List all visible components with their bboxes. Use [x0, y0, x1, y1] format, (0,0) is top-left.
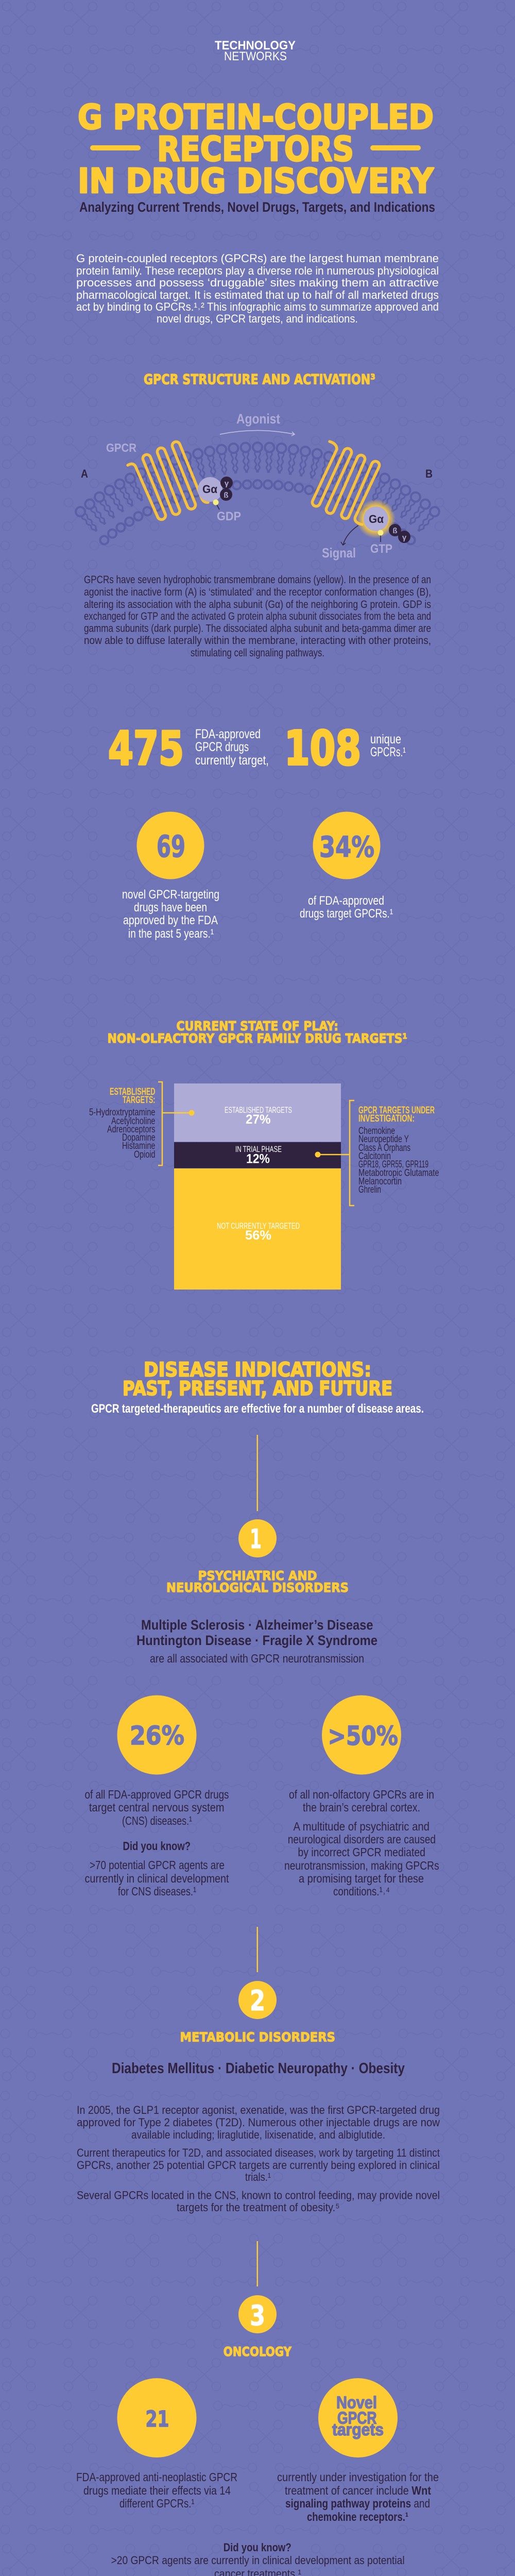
logo: Technology Networks: NETWORKS [224, 49, 287, 63]
stat circle: >50%: >50% [328, 1721, 398, 1752]
number badge 3: 3 [250, 2299, 265, 2332]
callout: targets under investigation bracket: Ghrelin [358, 1184, 381, 1195]
text: GPCR mechanism description: GPCRs have seven hydrophobic transmembrane domains (yellow). In the presence of an [84, 574, 431, 586]
text: >50% caption: the brain’s cerebral cortex. [303, 1801, 420, 1814]
callout: targets under investigation bracket: GPCR TARGETS UNDER [358, 1105, 435, 1116]
text: 21 caption: FDA-approved anti-neoplastic GPCR [76, 2470, 237, 2484]
number badge 1: 1 [250, 1524, 262, 1555]
chart: stacked bar of GPCR targets [174, 1083, 341, 1290]
bar segment: not currently targeted 56% [174, 1168, 341, 1290]
callout: targets under investigation bracket [315, 1100, 439, 1206]
text: GPCR mechanism description: altering its association with the alpha subunit (Gα) of the neighboring G protein. GDP is [84, 599, 431, 611]
stat circle: 69: in the past 5 years.¹ [128, 927, 214, 941]
intro paragraph: protein family. These receptors play a diverse role in numerous physiological [76, 264, 439, 277]
stat: 475 drugs target 108 GPCRs: unique [370, 732, 401, 747]
stat circle: 69: novel GPCR-targeting [122, 888, 219, 902]
stat circle: 34%: drugs target GPCRs.¹ [300, 907, 393, 921]
text: novel targets caption [277, 2470, 439, 2523]
stat circle: novel GPCR targets: targets [332, 2420, 384, 2439]
stat circle: 69 [122, 812, 219, 941]
text: oncology did you know: Did you know? [224, 2541, 291, 2554]
callout: targets under investigation bracket: Neuropeptide Y [358, 1133, 409, 1145]
arrow: signal [341, 526, 358, 545]
bar segment: not currently targeted 56%: 56% [245, 1228, 271, 1243]
callout: targets under investigation bracket: Metabotropic Glutamate [358, 1167, 439, 1179]
bar segment: not currently targeted 56%: NOT CURRENTLY TARGETED [217, 1221, 300, 1231]
number badge 3 [238, 2295, 277, 2333]
diagram labels [81, 411, 433, 561]
callout: targets under investigation bracket: Melanocortin [358, 1176, 402, 1187]
callout: established targets bracket: Opioid [134, 1149, 156, 1160]
stat: 475 drugs target 108 GPCRs [108, 721, 406, 776]
text: metabolic disorders paragraph: targets for the treatment of obesity.⁵ [177, 2201, 340, 2214]
text: 21 caption: drugs mediate their effects via 14 [83, 2484, 231, 2497]
callout: established targets bracket: TARGETS: [123, 1095, 156, 1106]
callout: targets under investigation bracket: GPR18, GPR55, GPR119 [358, 1159, 428, 1170]
text: >50% caption: A multitude of psychiatric and [294, 1820, 430, 1833]
text: 26% caption and did you know: for CNS diseases.¹ [118, 1885, 196, 1898]
callout: established targets bracket: 5-Hydroxtryptamine [89, 1107, 156, 1118]
text: metabolic disorders paragraph: Current therapeutics for T2D, and associated diseases, work by targeting 11 distinct [77, 2146, 440, 2159]
heading: disease indications: DISEASE INDICATIONS: [144, 1358, 371, 1381]
callout: targets under investigation bracket: Class A Orphans [358, 1142, 410, 1154]
arrow: agonist [220, 431, 295, 436]
text: GPCR mechanism description: stimulating cell signaling pathways. [191, 647, 324, 659]
text: metabolic disease list: Diabetes Mellitus · Diabetic Neuropathy · Obesity [112, 2060, 405, 2077]
callout: established targets bracket: Acetylcholine [111, 1115, 156, 1127]
heading: current state of play: CURRENT STATE OF PLAY: [176, 1019, 338, 1033]
text: metabolic disorders paragraph: available including; liraglutide, lixisenatide, and albiglutide. [131, 2128, 385, 2141]
intro paragraph: pharmacological target. It is estimated that up to half of all marketed drugs [76, 289, 439, 301]
callout: established targets bracket: Dopamine [122, 1132, 156, 1143]
intro paragraph: act by binding to GPCRs.¹˒² This infographic aims to summarize approved and [76, 300, 439, 313]
text: GPCR mechanism description: agonist the inactive form (A) is ‘stimulated’ and the receptor conformation changes (B), [84, 586, 431, 598]
diagram labels: A [81, 467, 88, 480]
stat: 475 drugs target 108 GPCRs: FDA-approved [195, 727, 261, 741]
callout: established targets bracket [89, 1082, 195, 1165]
text: 26% caption and did you know: Did you know? [123, 1839, 191, 1853]
active G protein with glow: ß [392, 527, 398, 535]
stat circle: 34% [300, 812, 393, 921]
stat circle: 21 [117, 2378, 197, 2458]
active G protein with glow: γ [402, 533, 407, 542]
title: G PROTEIN-COUPLED [78, 97, 434, 137]
heading: current state of play [107, 1019, 407, 1046]
diagram labels: Agonist [236, 411, 280, 427]
diagram labels: B [425, 467, 433, 480]
diagram: GPCR activation on membrane [74, 411, 441, 561]
text: novel targets caption: treatment of cancer include Wnt [285, 2484, 431, 2497]
bar segment: in trial phase 12%: IN TRIAL PHASE [235, 1144, 282, 1154]
text: metabolic disorders paragraph: GPCRs, another 25 potential GPCR targets are currently being explored in clinical [77, 2159, 440, 2172]
text: GPCR mechanism description: now able to diffuse laterally within the membrane, interacting with other proteins, [84, 635, 431, 647]
diagram labels: GDP [217, 510, 241, 523]
callout: established targets bracket: ESTABLISHED [110, 1087, 156, 1097]
text: 26% caption and did you know: >70 potential GPCR agents are [90, 1858, 225, 1872]
text: GPCR mechanism description: gamma subunits (dark purple). The dissociated alpha subunit and beta-gamma dimer are [84, 622, 431, 635]
text: >50% caption: neurotransmission, making GPCRs [284, 1859, 439, 1872]
stat: 475 drugs target 108 GPCRs: currently target, [195, 753, 269, 768]
text: neurological diseases list: Huntington Disease · Fragile X Syndrome [136, 1633, 377, 1648]
connector line 1 [256, 1435, 258, 1511]
text: >50% caption [284, 1788, 439, 1898]
intro paragraph: G protein-coupled receptors (GPCRs) are the largest human membrane [76, 252, 439, 265]
heading: psychiatric and neurological disorders: PSYCHIATRIC AND [198, 1568, 317, 1583]
title: IN DRUG DISCOVERY [78, 161, 434, 201]
text: novel targets caption: chemokine receptors.¹ [307, 2510, 408, 2523]
intro paragraph: novel drugs, GPCR targets, and indications. [157, 312, 358, 325]
diagram labels: Signal [322, 545, 356, 561]
stat circle: novel GPCR targets: GPCR [337, 2408, 377, 2428]
text: 21 caption: different GPCRs.¹ [119, 2497, 195, 2510]
stat circle: novel GPCR targets [318, 2378, 398, 2458]
inactive G protein [198, 477, 233, 510]
text: oncology did you know [111, 2541, 405, 2576]
text: >50% caption: by incorrect GPCR mediated [298, 1845, 425, 1859]
stat: 475 drugs target 108 GPCRs: 108 [284, 721, 361, 776]
number badge 1 [238, 1519, 277, 1557]
text: >50% caption: neurological disorders are caused [288, 1833, 436, 1846]
stat: 475 drugs target 108 GPCRs: GPCR drugs [195, 740, 249, 754]
active G protein with glow [356, 499, 410, 543]
bar segment: established targets 27% [174, 1083, 341, 1142]
text: novel targets caption: signaling pathway proteins and [285, 2497, 430, 2510]
active G protein with glow: Gα [369, 513, 384, 526]
title [78, 97, 434, 201]
stat circle: novel GPCR targets: Novel [336, 2393, 377, 2412]
inactive G protein: Gα [202, 483, 217, 496]
callout: established targets bracket: Histamine [122, 1140, 156, 1151]
logo: Technology Networks: TECHNOLOGY [215, 39, 296, 53]
stat circle: 69: drugs have been [134, 901, 207, 914]
heading: disease indications: PAST, PRESENT, AND FUTURE [123, 1377, 392, 1400]
bar segment: in trial phase 12% [174, 1142, 341, 1168]
callout: established targets bracket: Adrenoceptors [107, 1124, 156, 1135]
callout: targets under investigation bracket: INVESTIGATION: [358, 1113, 415, 1124]
text: >50% caption: of all non-olfactory GPCRs are in [289, 1788, 434, 1801]
text: 21 caption [76, 2470, 237, 2510]
intro paragraph: processes and possess ‘druggable’ sites making them an attractive [76, 276, 439, 289]
intro paragraph [76, 252, 439, 325]
text: metabolic disorders paragraph: approved for Type 2 diabetes (T2D). Numerous other injectable drugs are now [77, 2116, 440, 2129]
heading: GPCR structure and activation: GPCR STRUCTURE AND ACTIVATION³ [144, 372, 375, 387]
stat circle: 26%: 26% [130, 1721, 184, 1751]
subheading: disease indications: GPCR targeted-therapeutics are effective for a number of disease areas. [91, 1402, 424, 1416]
text: metabolic disorders paragraph: trials.¹ [245, 2171, 271, 2183]
title: RECEPTORS [157, 129, 354, 169]
bar segment: in trial phase 12%: 12% [246, 1152, 270, 1166]
diagram labels: GPCR [106, 441, 136, 454]
stat circle: 34%: of FDA-approved [308, 894, 384, 908]
text: neurological diseases list [136, 1617, 377, 1665]
diagram labels: GTP [370, 542, 392, 556]
heading: psychiatric and neurological disorders: NEUROLOGICAL DISORDERS [166, 1580, 349, 1595]
callout: targets under investigation bracket: Chemokine [358, 1125, 395, 1137]
text: novel targets caption: currently under investigation for the [277, 2470, 439, 2484]
heading: disease indications [123, 1358, 392, 1400]
heading: psychiatric and neurological disorders [166, 1568, 349, 1595]
number badge 2: 2 [250, 1985, 265, 2017]
text: GPCR mechanism description [84, 574, 431, 659]
left GPCR serpentine [128, 442, 208, 519]
text: GPCR mechanism description: exchanged for GTP and the activated G protein alpha subunit dissociates from the beta and [84, 611, 431, 622]
stat circle: 69: approved by the FDA [123, 913, 218, 927]
text: 26% caption and did you know: of all FDA-approved GPCR drugs [84, 1788, 229, 1801]
text: metabolic disorders paragraph [77, 2104, 440, 2214]
text: oncology did you know: >20 GPCR agents are currently in clinical development as potential [111, 2554, 405, 2567]
subtitle: Analyzing Current Trends, Novel Drugs, Targets, and Indications [79, 199, 435, 215]
text: neurological diseases list: Multiple Sclerosis · Alzheimer’s Disease [141, 1617, 373, 1633]
number badge 2 [238, 1981, 277, 2019]
text: 26% caption and did you know: currently in clinical development [84, 1872, 229, 1885]
inactive G protein: γ [225, 479, 229, 488]
stat circle: 21: 21 [145, 2406, 169, 2432]
stat: 475 drugs target 108 GPCRs: 475 [108, 722, 184, 776]
heading: oncology: ONCOLOGY [224, 2344, 292, 2359]
text: 26% caption and did you know: (CNS) diseases.¹ [122, 1814, 192, 1827]
stat circle: 26% [117, 1695, 197, 1774]
logo: Technology Networks [215, 39, 296, 63]
bar segment: established targets 27%: ESTABLISHED TARGETS [225, 1105, 292, 1115]
connector line 2 [256, 1927, 258, 1972]
stat circle: 34%: 34% [319, 831, 374, 863]
connector line 3 [256, 2241, 258, 2286]
stat circle: 69: 69 [157, 829, 185, 864]
text: >50% caption: a promising target for these [299, 1872, 424, 1885]
text: neurological diseases list: are all associated with GPCR neurotransmission [150, 1652, 364, 1665]
stat: 475 drugs target 108 GPCRs: GPCRs.¹ [370, 745, 406, 759]
text: 26% caption and did you know: target central nervous system [89, 1801, 225, 1814]
right GPCR serpentine [312, 442, 380, 524]
stat circle: >50% [322, 1695, 401, 1774]
callout: targets under investigation bracket: Calcitonin [358, 1150, 391, 1162]
text: >50% caption: conditions.¹˒⁴ [333, 1885, 390, 1898]
heading: metabolic disorders: METABOLIC DISORDERS [180, 2030, 335, 2044]
bar segment: established targets 27%: 27% [246, 1112, 271, 1127]
heading: current state of play: NON-OLFACTORY GPCR FAMILY DRUG TARGETS¹ [107, 1031, 407, 1046]
text: metabolic disorders paragraph: Several GPCRs located in the CNS, known to control feeding, may provide novel [77, 2189, 440, 2202]
text: 26% caption and did you know [84, 1788, 229, 1898]
text: metabolic disorders paragraph: In 2005, the GLP1 receptor agonist, exenatide, was the first GPCR-targeted drug [77, 2104, 440, 2116]
lipid bilayer membrane [74, 443, 441, 546]
inactive G protein: ß [224, 491, 229, 500]
